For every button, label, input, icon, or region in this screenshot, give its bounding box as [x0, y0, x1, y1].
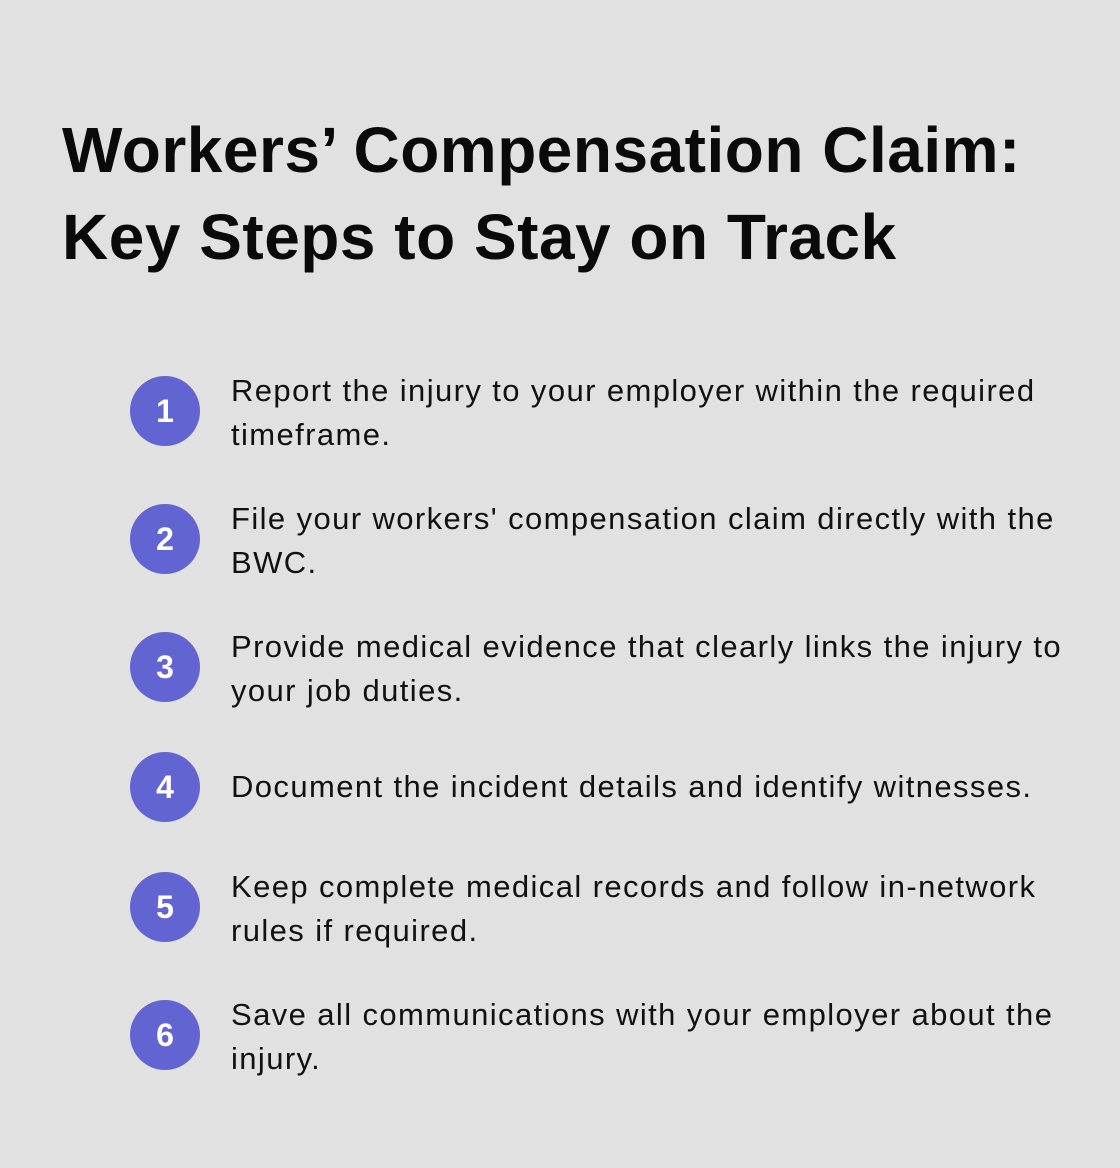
step 5	[130, 869, 1036, 948]
step 6: injury.	[231, 1041, 321, 1076]
title: Key Steps to Stay on Track	[62, 201, 897, 273]
step 2: File your workers' compensation claim directly with the	[231, 501, 1055, 536]
step 3: Provide medical evidence that clearly links the injury to	[231, 629, 1062, 664]
step 6: 6	[156, 1017, 174, 1053]
step 6	[130, 997, 1053, 1076]
step 3: your job duties.	[231, 673, 464, 708]
step 2: 2	[156, 521, 174, 557]
step 4	[130, 752, 1032, 822]
step 2: BWC.	[231, 545, 318, 580]
step 5: 5	[156, 889, 174, 925]
title	[62, 114, 1021, 273]
step 3	[130, 629, 1062, 708]
step 4: Document the incident details and identify witnesses.	[231, 769, 1032, 804]
step 5: Keep complete medical records and follow in-network	[231, 869, 1036, 904]
step 1: timeframe.	[231, 417, 391, 452]
step 4: 4	[156, 769, 174, 805]
step 1: 1	[156, 393, 174, 429]
step 3: 3	[156, 649, 174, 685]
step 1	[130, 373, 1035, 452]
step 6: Save all communications with your employer about the	[231, 997, 1053, 1032]
step 2	[130, 501, 1055, 580]
step 5: rules if required.	[231, 913, 478, 948]
step 1: Report the injury to your employer within the required	[231, 373, 1035, 408]
title: Workers’ Compensation Claim:	[62, 114, 1021, 186]
